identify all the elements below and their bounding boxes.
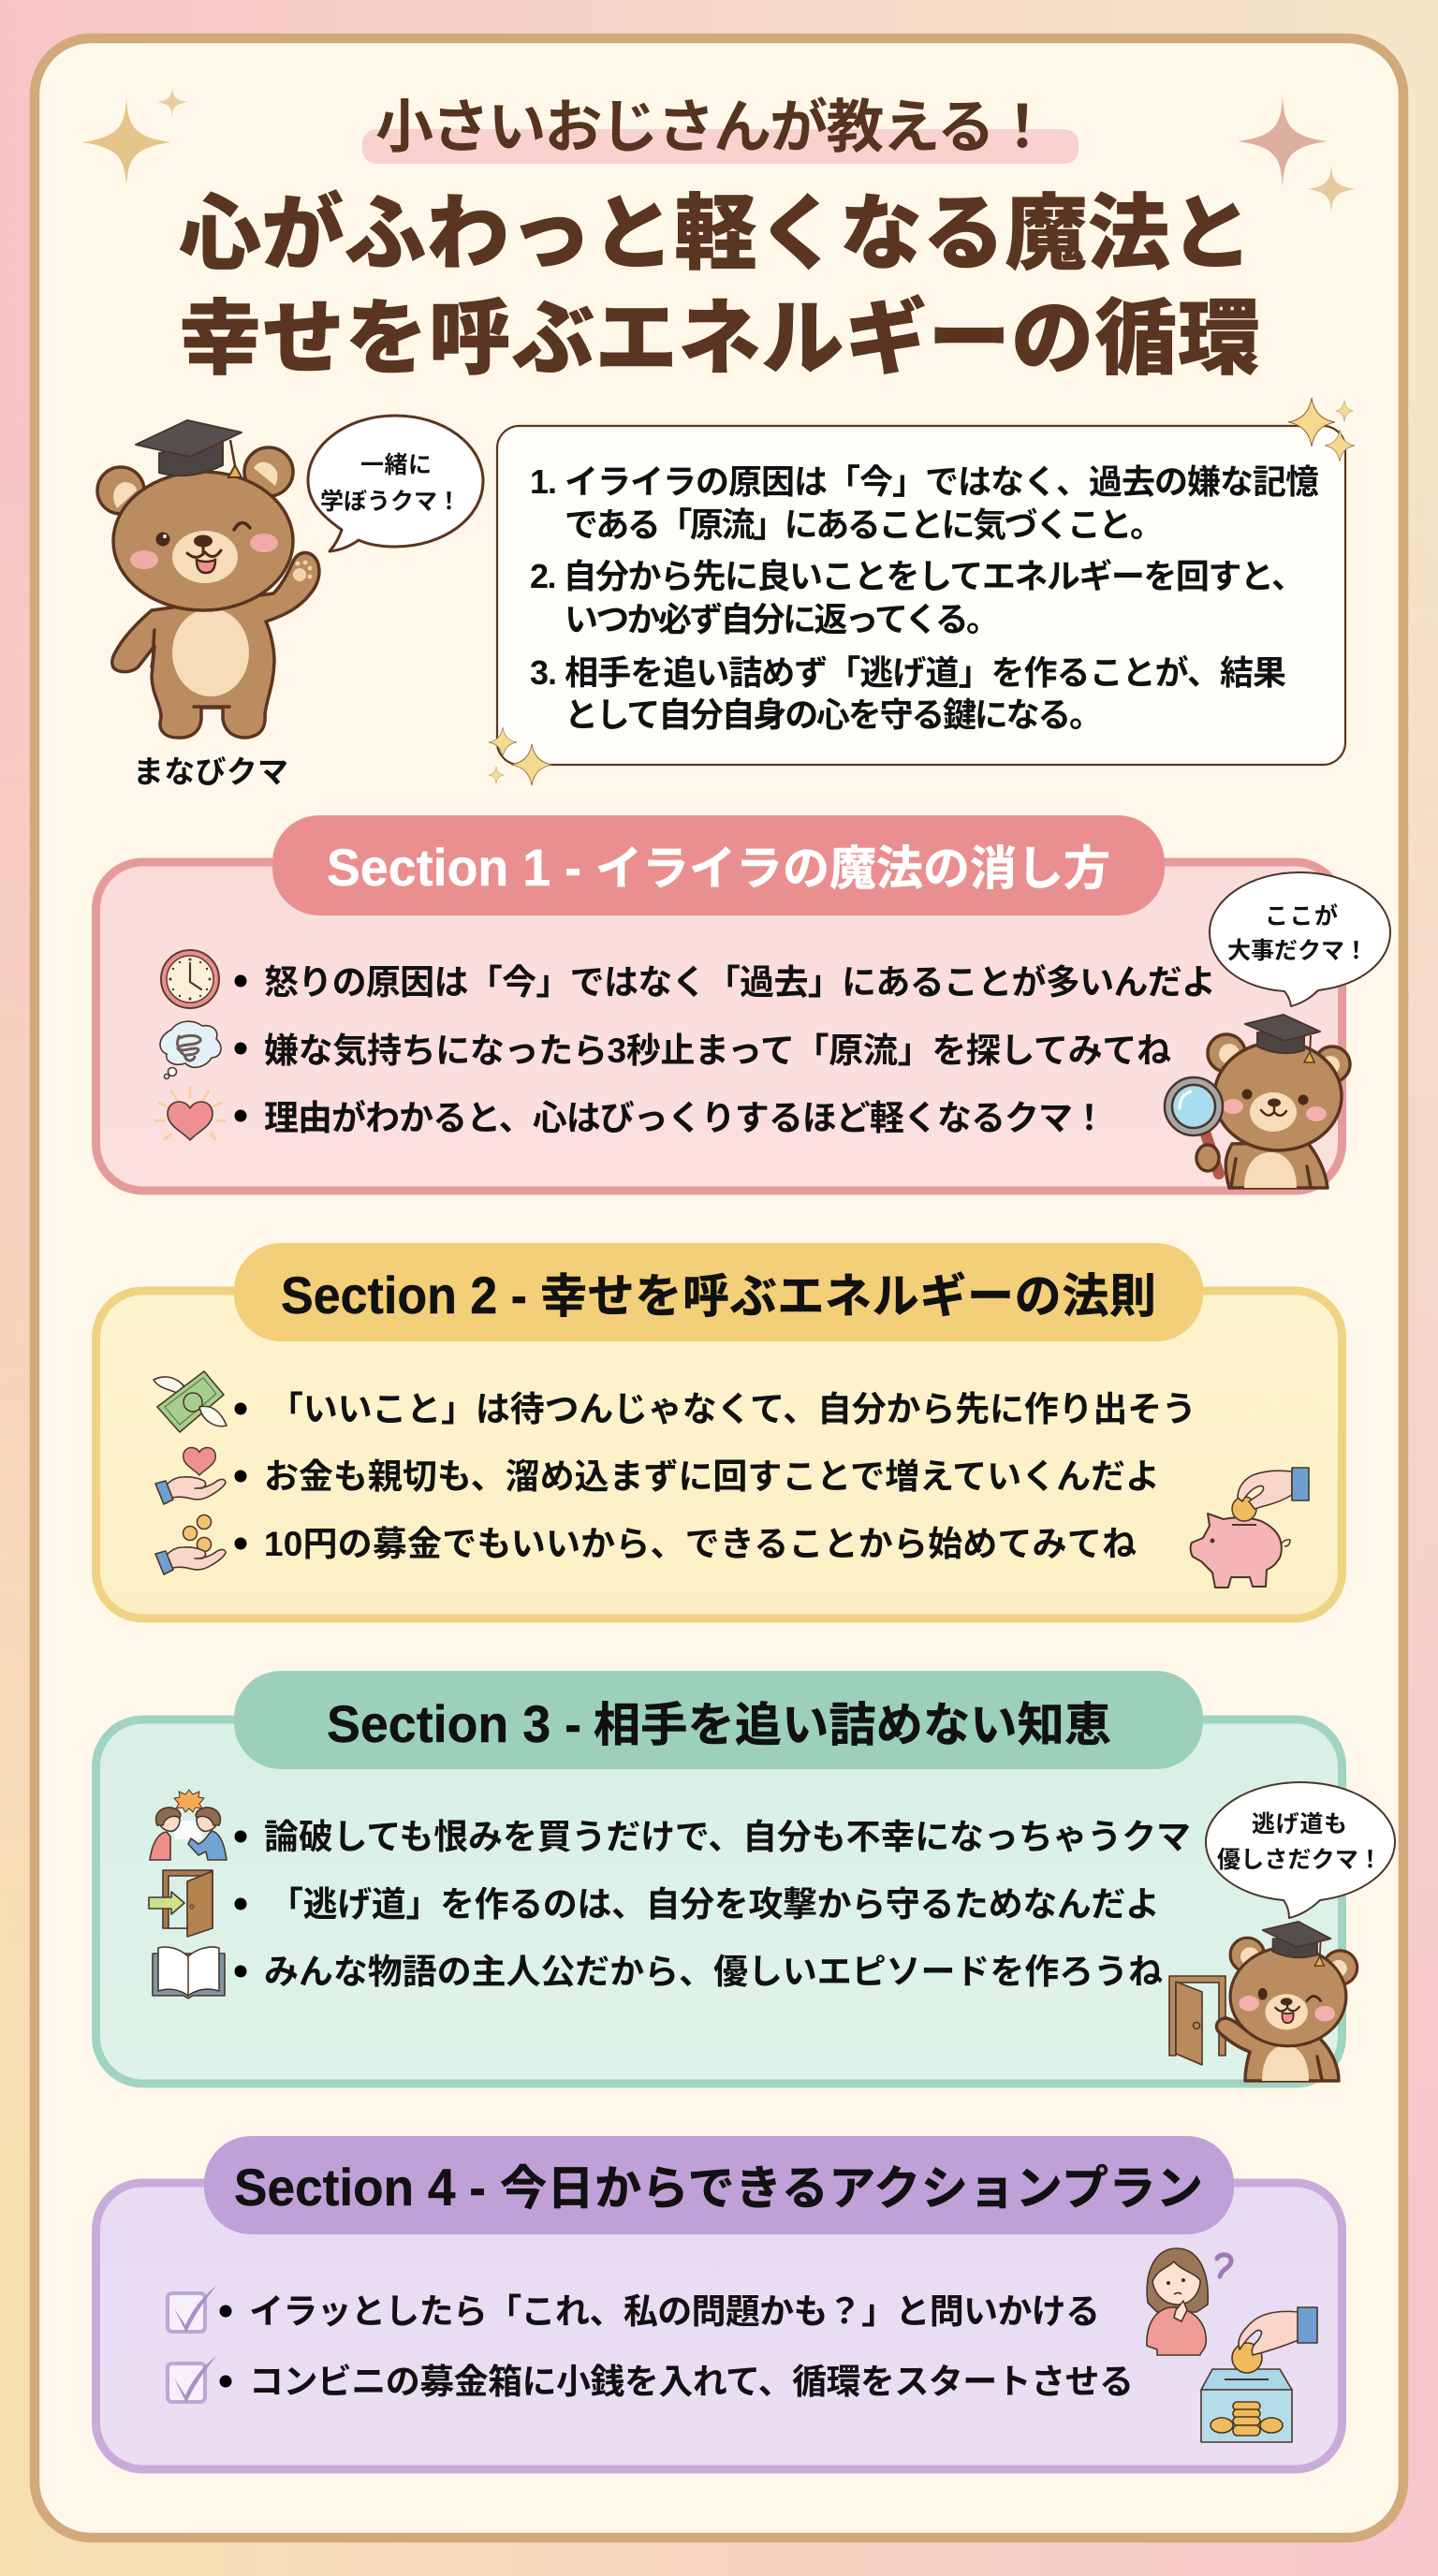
bear body	[1225, 1142, 1328, 1188]
summary point 2	[530, 557, 1305, 638]
summary point 3: 3. 相手を追い詰めず「逃げ道」を作ることが、結果	[530, 653, 1286, 692]
speech bubble: 一緒に学ぼうクマ	[308, 416, 483, 551]
icon: exit door with arrow	[149, 1870, 213, 1937]
bullet list: section 2: 10円の募金でもいいから、できることから始めてみてね	[264, 1525, 1137, 1563]
sparkle: top left small	[156, 86, 188, 118]
graduation cap	[1245, 1015, 1320, 1062]
bullet list: section 1	[234, 963, 1216, 1137]
speech bubble: 逃げ道も優しさだクマ: 優しさだクマ！	[1217, 1847, 1382, 1873]
icon: flying money	[154, 1371, 227, 1432]
bear face	[130, 522, 278, 583]
speech bubble: ここが大事だクマ: ここが	[1265, 902, 1338, 929]
bullet list: section 1: 理由がわかると、心はびっくりするほど軽くなるクマ！	[264, 1099, 1107, 1137]
title: 幸せを呼ぶエネルギーの循環	[179, 292, 1260, 385]
icon: hand with coins	[155, 1515, 226, 1574]
icon: thought cloud with tangled swirl	[160, 1021, 221, 1078]
speech bubble: ここが大事だクマ: 大事だクマ！	[1227, 938, 1368, 964]
magnifying glass	[1165, 1077, 1223, 1174]
sparkle: top right large	[1238, 96, 1328, 186]
mascot bear: まなびクマ	[97, 420, 319, 738]
section 3 heading	[234, 1671, 1203, 1769]
sparkle: top right small	[1307, 165, 1356, 213]
icon: two people arguing	[150, 1790, 227, 1860]
speech bubble: 逃げ道も優しさだクマ: 逃げ道も	[1252, 1811, 1347, 1837]
subtitle: 小さいおじさんが教える！	[375, 95, 1051, 160]
graduation cap	[136, 420, 242, 477]
icon: open book	[153, 1947, 225, 1998]
bullet list: section 3: みんな物語の主人公だから、優しいエピソードを作ろうね	[264, 1953, 1163, 1991]
icon: thinking woman	[1147, 2248, 1208, 2355]
title	[179, 187, 1260, 385]
panel: section 1	[95, 815, 1390, 1191]
sparkle: top left large	[81, 97, 171, 187]
panel: section 3	[95, 1671, 1395, 2084]
title: 心がふわっと軽くなる魔法と	[179, 187, 1253, 280]
speech bubble: 一緒に学ぼうクマ: 一緒に	[360, 452, 432, 478]
icon: question mark	[1217, 2255, 1231, 2276]
sparkles on summary box	[489, 398, 1355, 785]
icon: hand with heart	[155, 1447, 226, 1504]
bear head	[1230, 1922, 1357, 2046]
bear head	[113, 472, 293, 610]
summary point 3: として自分自身の心を守る鍵になる。	[565, 695, 1103, 734]
section 2 heading	[234, 1243, 1203, 1341]
section 1 heading: Section 1 -	[327, 838, 581, 897]
summary box	[497, 426, 1345, 765]
bear ears	[97, 467, 144, 514]
bear body	[112, 552, 319, 738]
bullet list: section 3: 論破しても恨みを買うだけで、自分も不幸になっちゃうクマ	[264, 1818, 1191, 1856]
section 4 heading	[204, 2136, 1234, 2234]
icon: piggy bank with coin	[1191, 1468, 1309, 1588]
section 4 heading: 今日からできるアクションプラン	[500, 2162, 1203, 2215]
bullet list: section 2: お金も親切も、溜め込まずに回すことで増えていくんだよ	[264, 1457, 1160, 1496]
icon: checkbox 1	[168, 2286, 216, 2333]
bullet list: section 4	[219, 2292, 1134, 2401]
mascot name: まなびクマ	[133, 754, 288, 789]
subtitle highlight bar	[362, 129, 1078, 164]
icon: clock	[161, 950, 219, 1008]
bullet list: section 4: コンビニの募金箱に小銭を入れて、循環をスタートさせる	[249, 2363, 1134, 2401]
bullet list: section 1: 怒りの原因は「今」ではなく「過去」にあることが多いんだよ	[264, 963, 1216, 1002]
bear body	[1216, 2018, 1339, 2081]
bullet list: section 3	[234, 1818, 1191, 1991]
bullet list: section 4: イラッとしたら「これ、私の問題かも？」と問いかける	[249, 2292, 1100, 2331]
icon: open door beside bear	[1169, 1976, 1225, 2065]
section 1 heading	[272, 815, 1165, 915]
section 3 heading: 相手を追い詰めない知恵	[594, 1699, 1111, 1751]
section 2 heading: 幸せを呼ぶエネルギーの法則	[540, 1270, 1156, 1323]
section 4 heading: Section 4 -	[234, 2158, 486, 2217]
section 3 heading: Section 3 -	[327, 1694, 581, 1753]
bear holding door	[1216, 1922, 1357, 2081]
summary point 2: いつか必ず自分に返ってくる。	[565, 600, 1000, 638]
bear face	[1223, 1090, 1327, 1132]
bear belly	[172, 608, 249, 696]
section 2 heading: Section 2 -	[281, 1266, 527, 1325]
bear ears	[1208, 1034, 1245, 1072]
summary point 1: 1. イライラの原因は「今」ではなく、過去の嫌な記憶	[530, 462, 1319, 501]
speech bubble: 逃げ道も優しさだクマ	[1206, 1782, 1395, 1918]
bear paw	[293, 561, 312, 581]
bullet list: section 1: 嫌な気持ちになったら3秒止まって「原流」を探してみてね	[264, 1032, 1171, 1070]
summary point 1: である「原流」にあることに気づくこと。	[565, 505, 1164, 544]
summary point 3	[530, 653, 1286, 734]
bullet list: section 2: 「いいこと」は待つんじゃなくて、自分から先に作り出そう	[269, 1390, 1196, 1428]
bullet list: section 2	[234, 1390, 1196, 1563]
speech bubble: 一緒に学ぼうクマ: 学ぼうクマ！	[320, 489, 461, 515]
section 1 heading: イライラの魔法の消し方	[595, 842, 1110, 895]
panel: section 4	[95, 2136, 1343, 2469]
bear head	[1214, 1042, 1342, 1150]
icon: checkbox 2	[168, 2356, 216, 2403]
summary point 2: 2. 自分から先に良いことをしてエネルギーを回すと、	[530, 557, 1305, 595]
panel: section 2	[95, 1243, 1343, 1618]
icon: hand dropping coin into donation box	[1201, 2307, 1317, 2442]
bear with magnifying glass	[1165, 1015, 1350, 1188]
icon: glowing heart	[155, 1087, 225, 1140]
bullet list: section 3: 「逃げ道」を作るのは、自分を攻撃から守るためなんだよ	[269, 1885, 1160, 1924]
speech bubble: ここが大事だクマ	[1210, 872, 1390, 1006]
summary point 1	[530, 462, 1319, 544]
